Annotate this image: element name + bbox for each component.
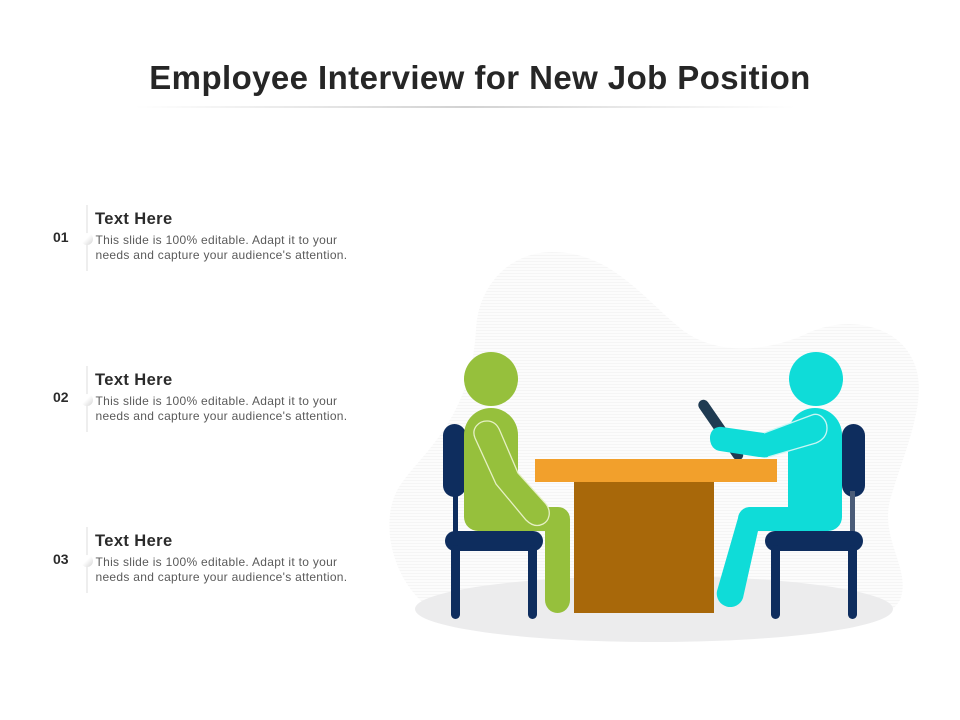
list item 03: 03	[53, 551, 69, 567]
list item 01: needs and capture your audience's attention.	[96, 248, 347, 262]
list item 02	[53, 366, 347, 432]
title: Employee Interview for New Job Position	[149, 59, 811, 96]
list item 02: 02	[53, 389, 69, 405]
list item 02: needs and capture your audience's attention.	[96, 409, 347, 423]
phone	[704, 405, 738, 455]
list item 03: needs and capture your audience's attention.	[96, 570, 347, 584]
desk	[535, 459, 777, 613]
list item 03: Text Here	[95, 532, 173, 550]
list item 01: Text Here	[95, 210, 173, 228]
list item 01	[53, 205, 347, 271]
list item 03: This slide is 100% editable. Adapt it to your	[96, 554, 337, 568]
title underline	[135, 106, 795, 108]
list item 01: This slide is 100% editable. Adapt it to your	[96, 232, 337, 246]
green person	[464, 352, 570, 613]
floor shadow	[415, 576, 893, 642]
right chair	[765, 424, 865, 619]
list item 03	[53, 527, 347, 593]
list item 02: Text Here	[95, 371, 173, 389]
list item 02: This slide is 100% editable. Adapt it to your	[96, 394, 337, 408]
cyan person	[710, 352, 843, 607]
left chair	[443, 424, 543, 619]
background blob	[389, 252, 919, 632]
list item 01: 01	[53, 229, 69, 245]
